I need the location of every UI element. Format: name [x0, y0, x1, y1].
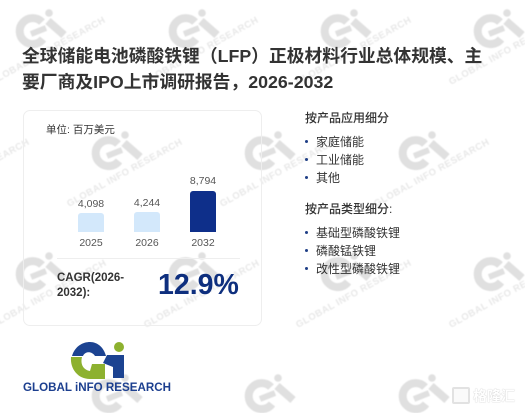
heading: by application: 按产品应用细分 [305, 111, 389, 125]
watermark pattern: GLOBAL INFO RESEARCH [294, 15, 413, 88]
year 2032: 2032 [191, 237, 215, 249]
bar chart [78, 175, 216, 249]
panel: market size card [23, 110, 262, 326]
CAGR label: 2032): [57, 287, 90, 299]
CAGR value: 12.9% [158, 269, 239, 301]
badge text: 格隆汇 [473, 388, 515, 404]
icon: Gelonghui corner badge [452, 387, 515, 404]
list: application segments [305, 135, 364, 185]
watermark pattern: GLOBAL INFO RESEARCH [294, 258, 413, 331]
bar 2032 [190, 191, 216, 232]
unit label: 单位: 百万美元 [46, 124, 115, 136]
year 2026: 2026 [135, 237, 159, 249]
list: product type segments [305, 226, 400, 276]
watermark pattern: GLOBAL INFO RESEARCH [218, 137, 337, 210]
watermark pattern: GLOBAL INFO RESEARCH [372, 137, 491, 210]
icon: Global Info Research logo: GLOBAL iNFO RESEARCH [23, 382, 171, 394]
watermark pattern: GLOBAL INFO RESEARCH [65, 137, 184, 210]
value 2025: 4,098 [78, 198, 104, 210]
CAGR label [57, 272, 124, 299]
title [22, 46, 482, 92]
title: 全球储能电池磷酸铁锂（LFP）正极材料行业总体规模、主 [22, 46, 482, 66]
value 2026: 4,244 [134, 197, 160, 209]
item: 基础型磷酸铁锂 [316, 226, 400, 240]
badge mark [452, 387, 470, 404]
item: 其他 [316, 171, 340, 185]
item: 工业储能 [316, 153, 364, 167]
year 2025: 2025 [79, 237, 103, 249]
CAGR label: CAGR(2026- [57, 272, 124, 284]
watermark pattern: GLOBAL INFO RESEARCH [141, 15, 260, 88]
value 2032: 8,794 [190, 175, 216, 187]
title: 要厂商及IPO上市调研报告，2026-2032 [22, 72, 333, 92]
item: 家庭储能 [316, 135, 364, 149]
item: 磷酸锰铁锂 [316, 244, 376, 258]
watermark pattern: GLOBAL INFO RESEARCH [142, 258, 261, 331]
bar 2025 [78, 213, 104, 232]
bar 2026 [134, 212, 160, 232]
item: 改性型磷酸铁锂 [316, 262, 400, 276]
heading: by product type: 按产品类型细分: [305, 202, 392, 216]
